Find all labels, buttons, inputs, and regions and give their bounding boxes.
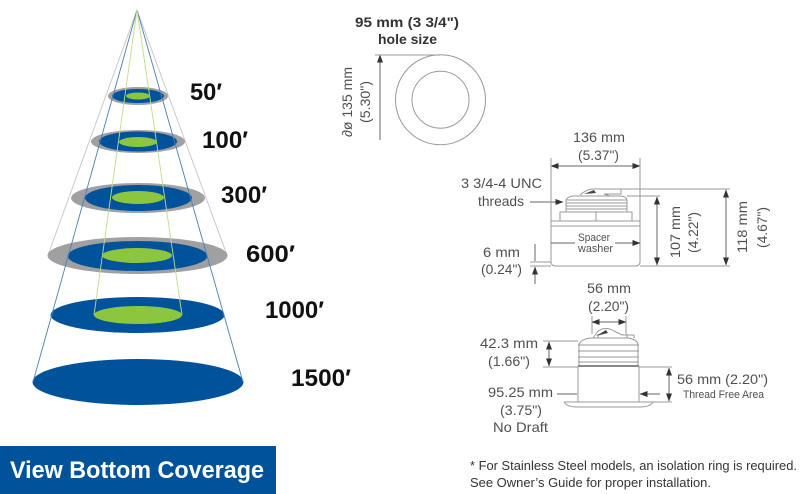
top width dimension arrow [592, 316, 626, 334]
107 mm dimension: 107 mm [667, 206, 683, 258]
green centre zones [94, 92, 182, 324]
label 1000 feet: 1000′ [265, 297, 324, 324]
gray beam lines [48, 10, 227, 255]
thread height text [480, 335, 538, 369]
thread free dimension [639, 367, 672, 402]
washer thickness text: 6 mm [483, 244, 520, 260]
spacer washer label: Spacer [578, 232, 610, 244]
top width dimension text: 56 mm [587, 280, 631, 296]
depth ring: 50 feet [108, 87, 168, 105]
no draft diameter text: (3.75") [500, 402, 542, 418]
banner: view bottom coverage [0, 446, 276, 494]
no draft diameter arrows [557, 393, 660, 395]
depth labels [190, 79, 351, 392]
diameter dimension text: (5.30") [357, 81, 373, 123]
footnote: * For Stainless Steel models, an isolation ring is required. [470, 458, 797, 473]
107 mm dimension [627, 196, 701, 266]
depth ring: 100 feet [91, 130, 185, 153]
depth ring: 1500 feet [32, 359, 244, 405]
118 mm dimension: (4.67") [754, 207, 770, 248]
label 50 feet: 50′ [190, 79, 222, 106]
label 100 feet: 100′ [202, 127, 248, 154]
diameter top extension line [375, 54, 440, 56]
thread height text: 42.3 mm [480, 335, 538, 351]
top width dimension text: (2.20") [588, 298, 629, 314]
spacer washer label [577, 232, 613, 255]
118 mm dimension: 118 mm [734, 201, 750, 253]
diameter dimension text: ∂ø 135 mm [339, 67, 355, 137]
hole size heading: 95 mm (3 3/4") [355, 14, 459, 30]
depth ring: 1000 feet [50, 297, 224, 333]
sonar coverage cone chart [32, 10, 244, 405]
diameter dimension text [339, 67, 373, 137]
no draft diameter text: No Draft [493, 419, 548, 435]
width dimension text [573, 129, 625, 163]
footnote [470, 458, 797, 490]
threads label [461, 175, 542, 209]
side view with spacer washer [461, 129, 770, 284]
blue beam lines [33, 10, 243, 382]
thread free text: 56 mm (2.20") [677, 371, 768, 387]
side view no draft [480, 280, 768, 435]
no draft transducer body [564, 328, 653, 407]
diameter dimension line [379, 55, 381, 140]
threads leader arrow [530, 201, 563, 203]
width dimension text: 136 mm [573, 129, 625, 145]
no draft diameter text [488, 384, 553, 435]
depth ring: 600 feet [48, 237, 228, 274]
threads label: 3 3/4-4 UNC [461, 175, 542, 191]
washer thickness text: (0.24") [481, 261, 522, 277]
transducer body [551, 158, 640, 266]
107 mm dimension: (4.22") [685, 212, 701, 253]
thread height text: (1.66") [488, 353, 530, 369]
washer thickness text [481, 244, 522, 277]
no draft diameter text: 95.25 mm [488, 384, 553, 400]
hole size heading [355, 14, 459, 47]
banner: view bottom coverage: View Bottom Coverage [10, 457, 264, 484]
top width dimension text [587, 280, 631, 314]
thread free text [677, 371, 768, 401]
washer thickness arrows [530, 244, 551, 284]
depth ring: 300 feet [71, 183, 205, 213]
width dimension arrow [551, 165, 640, 167]
spacer washer arrows [551, 242, 640, 244]
label 1500 feet: 1500′ [291, 365, 351, 392]
hole size heading: hole size [378, 31, 437, 47]
118 mm dimension [621, 189, 770, 266]
thread free text: Thread Free Area [683, 389, 765, 401]
footnote: See Owner’s Guide for proper installation. [470, 475, 711, 490]
width dimension text: (5.37") [578, 147, 619, 163]
label 300 feet: 300′ [221, 182, 267, 209]
hole size diagram [339, 14, 486, 145]
green beam lines [94, 10, 182, 315]
thread height arrow [543, 341, 578, 367]
spacer washer label: washer [577, 243, 613, 255]
label 600 feet: 600′ [246, 241, 295, 268]
threads label: threads [478, 193, 524, 209]
hole circles [396, 55, 486, 145]
